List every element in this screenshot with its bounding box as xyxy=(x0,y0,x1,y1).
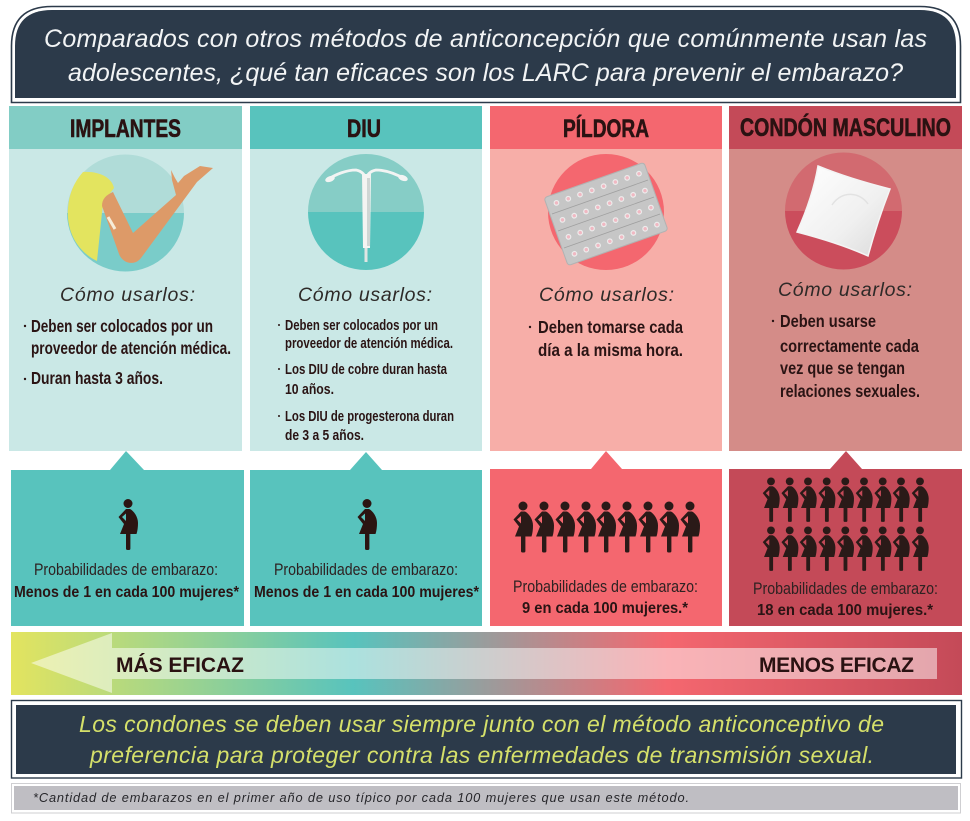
usage list: correctamente cada xyxy=(780,336,919,356)
probability text: Menos de 1 en cada 100 mujeres* xyxy=(14,584,240,601)
heading: DIU: DIU xyxy=(347,115,381,143)
nine pregnant figures xyxy=(514,502,700,552)
arrow xyxy=(31,633,937,693)
probability text xyxy=(513,578,698,617)
probability text: 9 en cada 100 mujeres.* xyxy=(522,600,689,617)
usage list: Los DIU de progesterona duran xyxy=(285,409,454,425)
icon: arm with implant xyxy=(67,155,213,271)
usage list: proveedor de atención médica. xyxy=(31,338,231,358)
usage list: Deben usarse xyxy=(780,311,876,331)
note text: Los condones se deben usar siempre junto con el método anticonceptivo de xyxy=(79,711,884,737)
probability text: 18 en cada 100 mujeres.* xyxy=(757,602,934,619)
footnote text: *Cantidad de embarazos en el primer año de uso típico por cada 100 mujeres que usan este método. xyxy=(33,790,689,805)
usage list: Deben tomarse cada xyxy=(538,317,683,337)
usage list xyxy=(529,317,683,360)
stat box: implantes xyxy=(11,451,244,626)
condom note panel xyxy=(12,700,962,778)
usage list: 10 años. xyxy=(285,382,334,398)
stat box: condon masculino xyxy=(729,451,962,626)
usage list: proveedor de atención médica. xyxy=(285,336,453,352)
usage list xyxy=(772,311,920,401)
probability text: Probabilidades de embarazo: xyxy=(274,561,458,579)
probability text: Probabilidades de embarazo: xyxy=(753,580,938,598)
heading: pildora: PÍLDORA xyxy=(563,114,649,143)
usage list xyxy=(24,316,231,388)
label: most effective: MÁS EFICAZ xyxy=(116,654,244,677)
title text xyxy=(44,25,927,87)
eighteen pregnant figures xyxy=(763,478,929,571)
probability text xyxy=(14,561,240,601)
note text xyxy=(79,711,884,768)
pregnant figure xyxy=(358,499,377,550)
probability text: Menos de 1 en cada 100 mujeres* xyxy=(254,584,480,601)
icon: IUD xyxy=(308,154,424,270)
usage list: relaciones sexuales. xyxy=(780,381,920,401)
usage list: Deben ser colocados por un xyxy=(31,316,213,336)
panel: DIU xyxy=(250,106,482,451)
title text: adolescentes, ¿qué tan eficaces son los LARC para prevenir el embarazo? xyxy=(68,59,903,87)
panel: condon masculino xyxy=(729,106,962,451)
effectiveness scale xyxy=(11,632,962,695)
stat box: pildora xyxy=(490,451,722,626)
panel: implantes xyxy=(9,106,242,451)
heading: implantes: IMPLANTES xyxy=(70,115,181,143)
probability text: Probabilidades de embarazo: xyxy=(513,578,698,596)
probability text: Probabilidades de embarazo: xyxy=(34,561,218,579)
label: least effective: MENOS EFICAZ xyxy=(759,654,914,677)
how to use heading: Cómo usarlos: xyxy=(539,284,674,306)
icon: pill pack xyxy=(544,154,668,270)
stat box: DIU xyxy=(250,452,482,626)
title banner xyxy=(12,6,960,102)
usage list: vez que se tengan xyxy=(780,358,905,378)
pregnant figure xyxy=(118,499,138,550)
how to use heading: Cómo usarlos: xyxy=(298,284,432,306)
note text: preferencia para proteger contra las enfermedades de transmisión sexual. xyxy=(89,742,874,768)
usage list: Los DIU de cobre duran hasta xyxy=(285,362,448,378)
usage list: de 3 a 5 años. xyxy=(285,428,364,444)
title text: Comparados con otros métodos de anticoncepción que comúnmente usan las xyxy=(44,25,927,53)
icon: condom packet xyxy=(785,152,902,270)
usage list: Duran hasta 3 años. xyxy=(31,368,163,388)
usage list: Deben ser colocados por un xyxy=(285,318,438,334)
probability text xyxy=(753,580,938,619)
how to use heading: Cómo usarlos: xyxy=(60,284,195,306)
footnote xyxy=(12,784,960,813)
usage list: día a la misma hora. xyxy=(538,340,683,360)
usage list xyxy=(278,318,454,444)
how to use heading: Cómo usarlos: xyxy=(778,279,912,301)
panel: pildora xyxy=(490,106,722,451)
probability text xyxy=(254,561,480,601)
